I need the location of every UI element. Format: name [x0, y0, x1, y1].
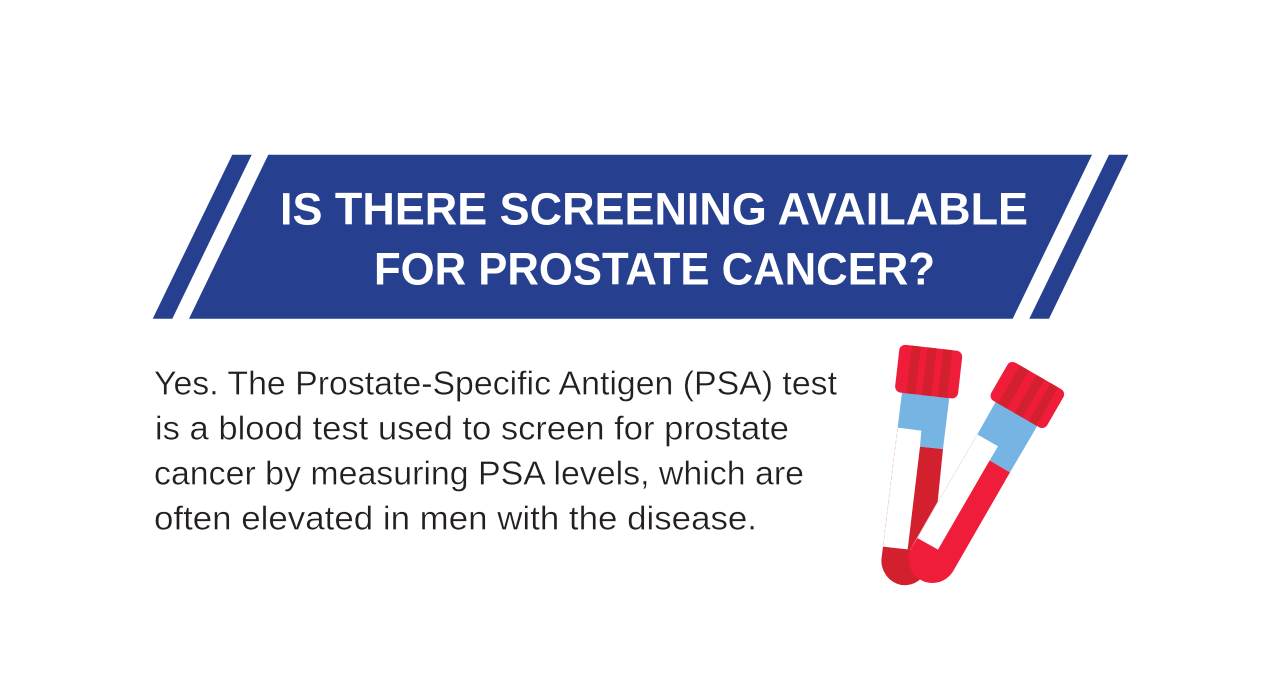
- banner left stripe: [153, 155, 252, 319]
- icon: blood test tubes: [881, 344, 1066, 585]
- right tube: [909, 360, 1066, 583]
- body text: [154, 364, 837, 536]
- body text: Yes. The Prostate-Specific Antigen (PSA) test: [154, 364, 837, 402]
- title: IS THERE SCREENING AVAILABLE: [280, 183, 1028, 234]
- body text: is a blood test used to screen for prostate: [155, 410, 789, 446]
- body text: cancer by measuring PSA levels, which are: [154, 454, 804, 492]
- body text: often elevated in men with the disease.: [154, 500, 757, 536]
- banner main panel: [189, 155, 1092, 319]
- title: FOR PROSTATE CANCER?: [374, 243, 935, 294]
- banner: [153, 155, 1128, 319]
- left tube: [881, 344, 963, 585]
- title: [280, 183, 1028, 294]
- banner right stripe: [1029, 155, 1128, 319]
